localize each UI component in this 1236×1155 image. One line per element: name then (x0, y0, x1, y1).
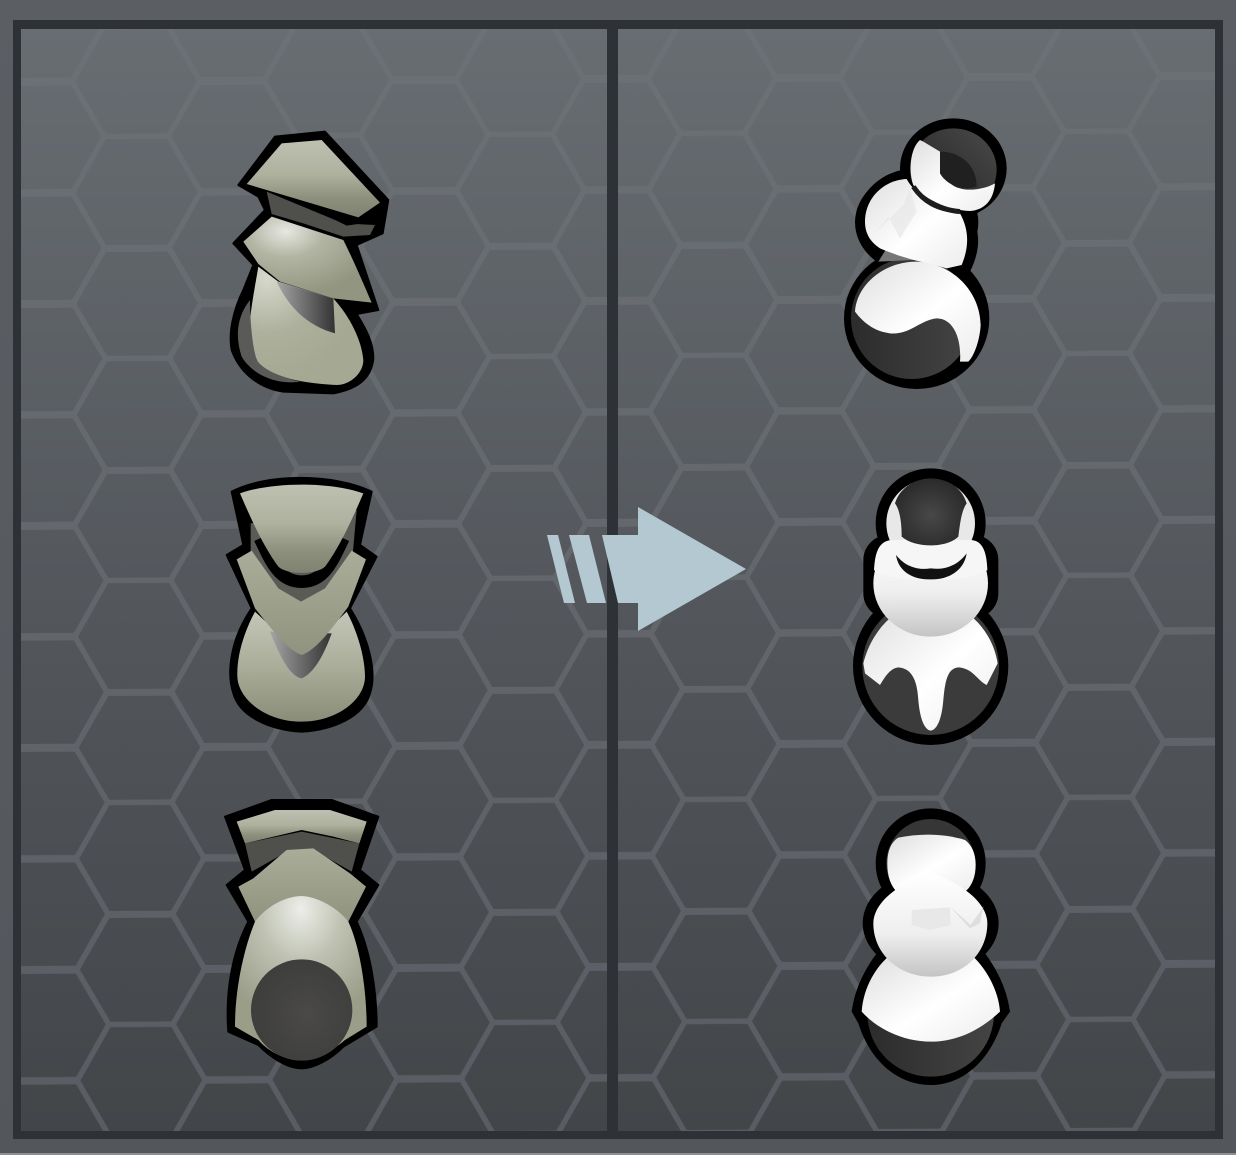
hexagon background pattern (21, 230, 1215, 1131)
armored figure: back view with dark ball (225, 800, 378, 1068)
base figure: front view (853, 468, 1008, 745)
armored figure: three-quarter view (231, 132, 388, 393)
panel: left (before) background (21, 29, 607, 1131)
arrow: transformation (547, 507, 746, 631)
bottom edge highlight (0, 1153, 1236, 1155)
base figure: three-quarter view (844, 118, 1007, 389)
panel: right (after) background (618, 29, 1215, 1131)
armored figure: front view (227, 478, 377, 732)
base figure: back view (852, 808, 1010, 1085)
